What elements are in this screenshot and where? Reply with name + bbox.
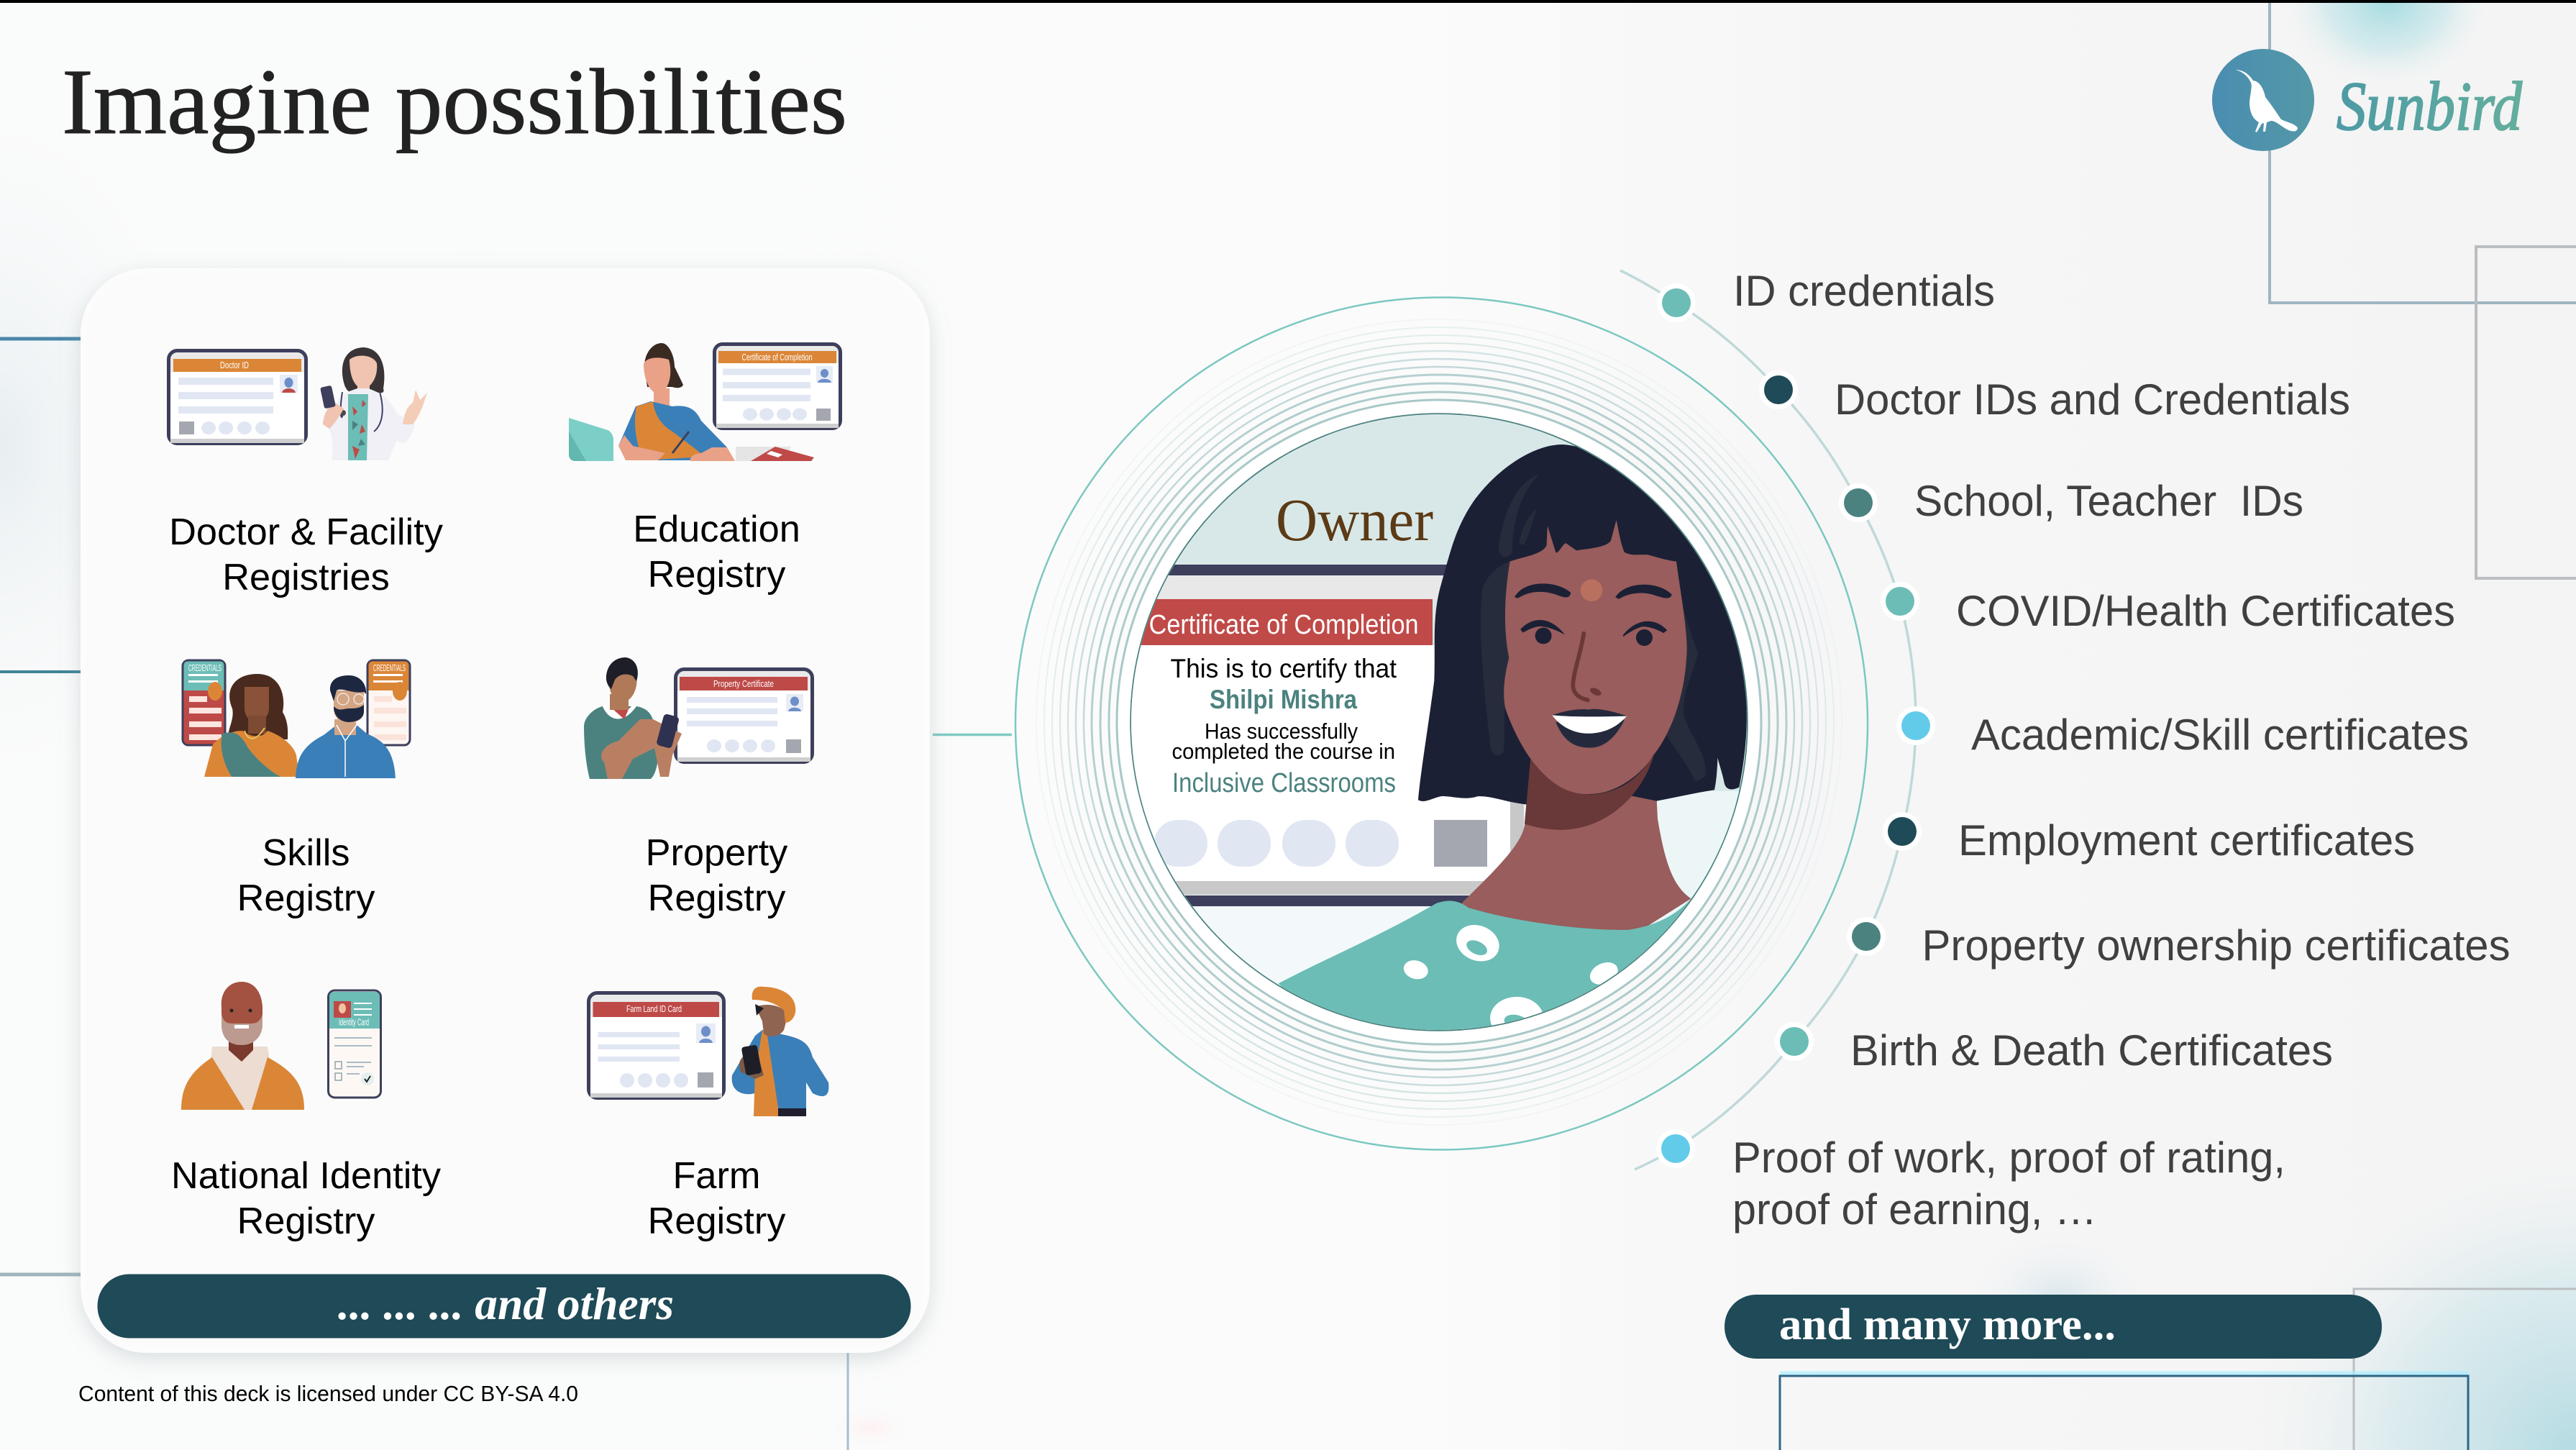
- item: academic certificates: Academic/Skill certificates: [1971, 711, 2469, 759]
- illustration: certificate card: [715, 344, 840, 429]
- callout: and many more: [1725, 1295, 2382, 1359]
- item: doctor IDs: Doctor IDs and Credentials: [1835, 375, 2350, 424]
- illustration: farmer: [732, 987, 828, 1116]
- callout: and many more: and many more...: [1779, 1300, 2116, 1349]
- illustration: identity card phone: Identity Card: [339, 1017, 369, 1027]
- illustration: identity card phone: [328, 990, 381, 1098]
- label: [633, 509, 800, 596]
- logo: Sunbird: [2212, 49, 2523, 151]
- label: Registry: [648, 1200, 786, 1242]
- illustration: doctor: [320, 347, 427, 460]
- registry: skills: [183, 660, 410, 919]
- illustration: doctor id card: Doctor ID: [220, 360, 249, 370]
- illustration: teacher: [569, 343, 814, 461]
- logo wordmark: Sunbird: [2337, 68, 2523, 145]
- callout: and others: [98, 1275, 910, 1338]
- callout: and others: ... ... ... and others: [338, 1278, 674, 1329]
- certificate heading: Certificate of Completion: [1149, 610, 1419, 640]
- illustration: farm land id card: Farm Land ID Card: [626, 1003, 682, 1014]
- illustration: elderly man: [181, 982, 304, 1110]
- label: Registry: [648, 554, 786, 596]
- label: [237, 832, 375, 919]
- timeline arc: [1620, 270, 1916, 1169]
- illustration: doctor id card: [168, 351, 306, 443]
- item: school, teacher IDs: School, Teacher IDs: [1914, 477, 2303, 525]
- concentric rings: [1015, 298, 1868, 1149]
- illustration: credential phones: [183, 660, 410, 745]
- item: proof of work: Proof of work, proof of rating,: [1732, 1134, 2285, 1182]
- illustration: credential phones: CREDENTIALS: [188, 662, 221, 673]
- label: Doctor & Facility: [169, 511, 444, 553]
- registry: education: [569, 343, 840, 596]
- item: COVID certificates: COVID/Health Certificates: [1956, 587, 2455, 635]
- label: National Identity: [171, 1155, 442, 1197]
- item: property certificates: Property ownership certificates: [1922, 921, 2510, 970]
- item: ID credentials: [1657, 267, 1995, 322]
- title: Imagine possibilities: [62, 50, 847, 154]
- certificate body text: [1171, 654, 1397, 798]
- label: Education: [633, 509, 800, 550]
- item: proof of work: [1656, 1129, 2285, 1234]
- certificate body text: This is to certify that: [1171, 654, 1397, 683]
- label: Registry: [237, 1200, 375, 1242]
- label: [169, 511, 444, 598]
- item: proof of work: proof of earning, …: [1732, 1185, 2097, 1234]
- certificate seals: [1154, 820, 1487, 867]
- list: credential types: [1656, 267, 2510, 1234]
- label: Registries: [222, 557, 390, 598]
- illustration: woman: [1278, 444, 1747, 1057]
- registry: farm: [588, 987, 828, 1242]
- certificate body text: Inclusive Classrooms: [1172, 768, 1396, 798]
- label: Farm: [672, 1155, 761, 1197]
- label: [646, 832, 788, 919]
- connector line: [933, 734, 1012, 736]
- label: Skills: [262, 832, 350, 874]
- illustration: property certificate card: Property Certificate: [713, 678, 774, 689]
- illustration: man with phone: [584, 657, 682, 779]
- certificate card: [1131, 565, 1524, 906]
- illustration: man: [296, 675, 396, 778]
- item: employment certificates: Employment certificates: [1958, 816, 2415, 865]
- illustration: farm land id card: [588, 993, 723, 1098]
- illustration: credential phones: CREDENTIALS: [373, 662, 406, 673]
- item: ID credentials: ID credentials: [1733, 267, 1995, 315]
- label: Registry: [237, 877, 375, 919]
- label: [648, 1155, 786, 1242]
- icon: sunbird badge: [2212, 49, 2314, 151]
- certificate body text: Shilpi Mishra: [1210, 685, 1357, 714]
- illustration: certificate card: Certificate of Completion: [742, 352, 813, 362]
- certificate body text: completed the course in: [1172, 739, 1395, 764]
- portrait label: Owner: [1276, 487, 1433, 554]
- illustration: property certificate card: [676, 669, 813, 762]
- label: [171, 1155, 442, 1242]
- illustration: woman: [204, 674, 299, 777]
- registry: doctor and facility: [168, 347, 444, 598]
- item: birth and death certificates: Birth & Death Certificates: [1850, 1026, 2333, 1075]
- registry: national identity: [171, 982, 442, 1242]
- footer licence note: Content of this deck is licensed under CC BY-SA 4.0: [78, 1381, 578, 1406]
- label: Property: [646, 832, 788, 874]
- label: Registry: [648, 877, 786, 919]
- registry: property: [584, 657, 813, 919]
- certificate body text: Has successfully: [1205, 719, 1358, 744]
- panel: registries: [81, 268, 930, 1353]
- illustration: owner portrait with certificate: [1131, 414, 1747, 1057]
